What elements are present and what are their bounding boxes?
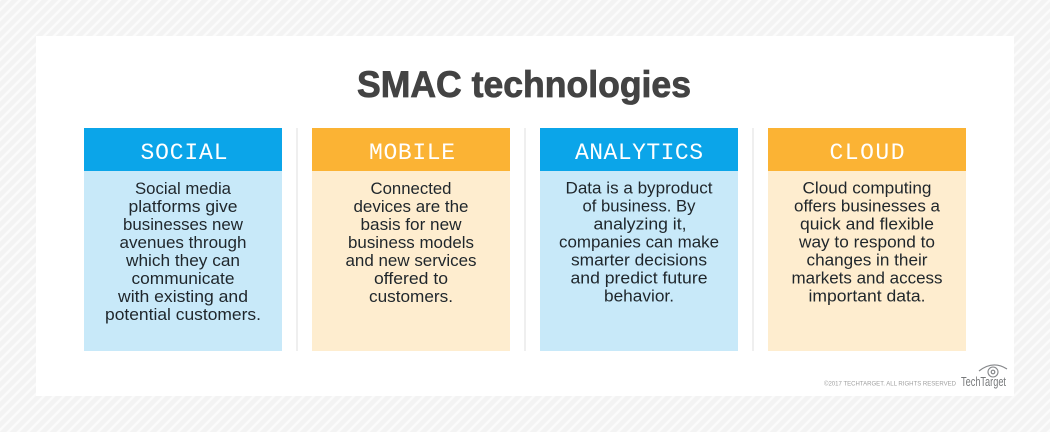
text: mobile: and new services (346, 251, 476, 270)
text: cloud: Cloud computing (802, 178, 932, 198)
text: mobile: offered to (374, 269, 448, 288)
icon: eye logo (979, 365, 1007, 377)
logo wordmark: TechTarget (961, 375, 1006, 389)
text: analytics (559, 178, 719, 306)
text: cloud: way to respond to (798, 232, 935, 252)
panel: social (84, 128, 282, 351)
text: mobile: customers. (369, 287, 453, 306)
text: analytics: companies can make (559, 232, 719, 252)
panel: analytics (540, 128, 738, 351)
copyright: ©2017 TECHTARGET. ALL RIGHTS RESERVED (824, 380, 956, 388)
text: cloud (792, 178, 942, 306)
text: social: avenues through (120, 233, 246, 252)
text: mobile (346, 179, 476, 306)
text: social: potential customers. (105, 305, 261, 324)
white panel (36, 36, 1014, 396)
text: cloud: markets and access (792, 268, 942, 288)
text: social: communicate (132, 269, 234, 288)
title: SMAC technologies (357, 64, 691, 105)
text: cloud: quick and flexible (800, 214, 934, 234)
text: social: platforms give (128, 197, 238, 216)
text: cloud: important data. (808, 286, 926, 306)
text: social: Social media (135, 179, 232, 198)
text: analytics: and predict future (570, 268, 708, 288)
text: analytics: of business. By (582, 196, 696, 216)
panel: mobile (312, 128, 510, 351)
text: social (105, 179, 261, 324)
text: analytics: behavior. (604, 286, 674, 306)
text: mobile: business models (348, 233, 474, 252)
text: social: businesses new (123, 215, 244, 234)
heading: cloud: CLOUD (830, 140, 904, 166)
text: mobile: devices are the (354, 197, 468, 216)
text: mobile: Connected (370, 179, 452, 198)
text: cloud: offers businesses a (794, 196, 941, 216)
panel: cloud (768, 128, 966, 351)
heading: social: SOCIAL (140, 140, 228, 166)
text: social: with existing and (117, 287, 248, 306)
text: analytics: smarter decisions (571, 250, 707, 270)
text: mobile: basis for new (360, 215, 462, 234)
heading: mobile: MOBILE (369, 140, 455, 166)
text: analytics: Data is a byproduct (566, 178, 713, 198)
text: analytics: analyzing it, (594, 214, 686, 234)
heading: analytics: ANALYTICS (575, 140, 703, 166)
text: cloud: changes in their (806, 250, 928, 270)
text: social: which they can (125, 251, 240, 270)
